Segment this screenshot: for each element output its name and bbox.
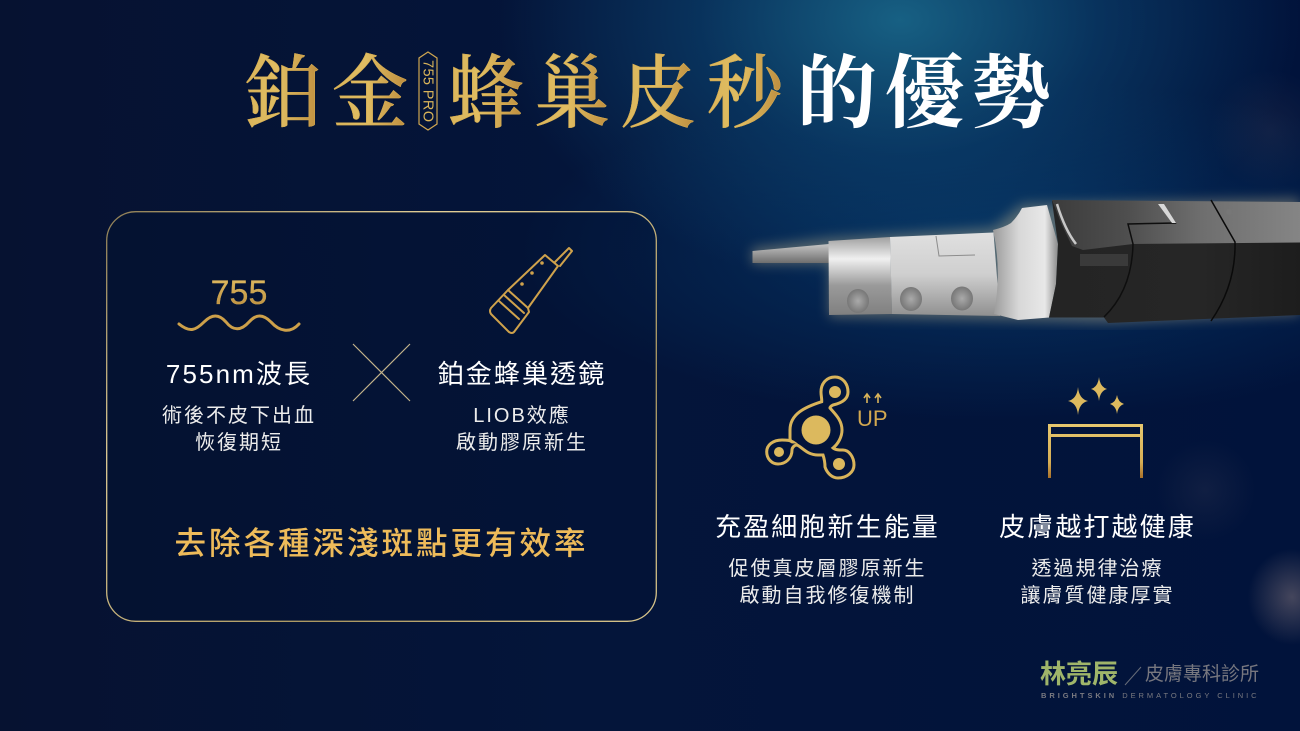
title: 皮 <box>620 51 696 139</box>
badge: 755 PRO: 755 PRO <box>420 60 436 122</box>
title: 優 <box>885 51 965 139</box>
title: 金 <box>332 51 408 139</box>
text: LIOB效應: LIOB效應 <box>473 405 571 427</box>
logo: clinic: 林亮辰 <box>1040 659 1118 689</box>
title: 秒 <box>707 51 783 139</box>
text: 促使真皮層膠原新生: 啟動自我修復機制 <box>740 585 916 607</box>
text: 促使真皮層膠原新生: 促使真皮層膠原新生 <box>728 558 926 580</box>
heading: 755nm波長: 755nm波長 <box>166 359 312 389</box>
icon: cell energy up: UP <box>857 406 888 431</box>
logo: clinic: BRIGHTSKIN DERMATOLOGY CLINIC <box>1041 691 1260 700</box>
icon: cell energy up <box>765 376 888 480</box>
callout: 去除各種深淺斑點更有效率: 去除各種深淺斑點更有效率 <box>174 525 588 561</box>
text: LIOB效應 <box>456 404 588 454</box>
text: LIOB效應: 啟動膠原新生 <box>456 432 588 454</box>
logo: clinic: 皮膚專科診所 <box>1145 664 1259 685</box>
heading: 鉑金蜂巢透鏡: 鉑金蜂巢透鏡 <box>438 359 606 389</box>
heading: 充盈細胞新生能量: 充盈細胞新生能量 <box>715 512 940 542</box>
text: 術後不皮下出血: 恢復期短 <box>195 432 283 454</box>
title: 鉑 <box>245 51 321 139</box>
logo: clinic <box>1040 659 1260 700</box>
title <box>245 51 1051 139</box>
icon: handpiece <box>489 247 573 334</box>
icon: cross <box>352 344 410 402</box>
text: 透過規律治療: 讓膚質健康厚實 <box>1020 585 1174 607</box>
text: 術後不皮下出血: 術後不皮下出血 <box>162 405 316 427</box>
badge: 755 PRO <box>418 51 438 131</box>
text: 透過規律治療 <box>1020 558 1174 607</box>
icon: 755 wave: 755 <box>211 274 267 312</box>
title: 蜂 <box>448 51 524 139</box>
title: 勢 <box>971 51 1051 139</box>
text: 透過規律治療: 透過規律治療 <box>1032 558 1164 580</box>
text: 術後不皮下出血 <box>162 405 316 454</box>
image: laser handpiece <box>746 191 1300 330</box>
panel: 755nm and honeycomb lens <box>106 211 657 622</box>
icon: sparkles and skin <box>1048 377 1143 478</box>
heading: 皮膚越打越健康: 皮膚越打越健康 <box>999 512 1196 542</box>
text: 促使真皮層膠原新生 <box>728 558 926 607</box>
icon: 755 wave <box>177 274 301 332</box>
title: 巢 <box>534 51 610 139</box>
title: 的 <box>797 51 877 139</box>
